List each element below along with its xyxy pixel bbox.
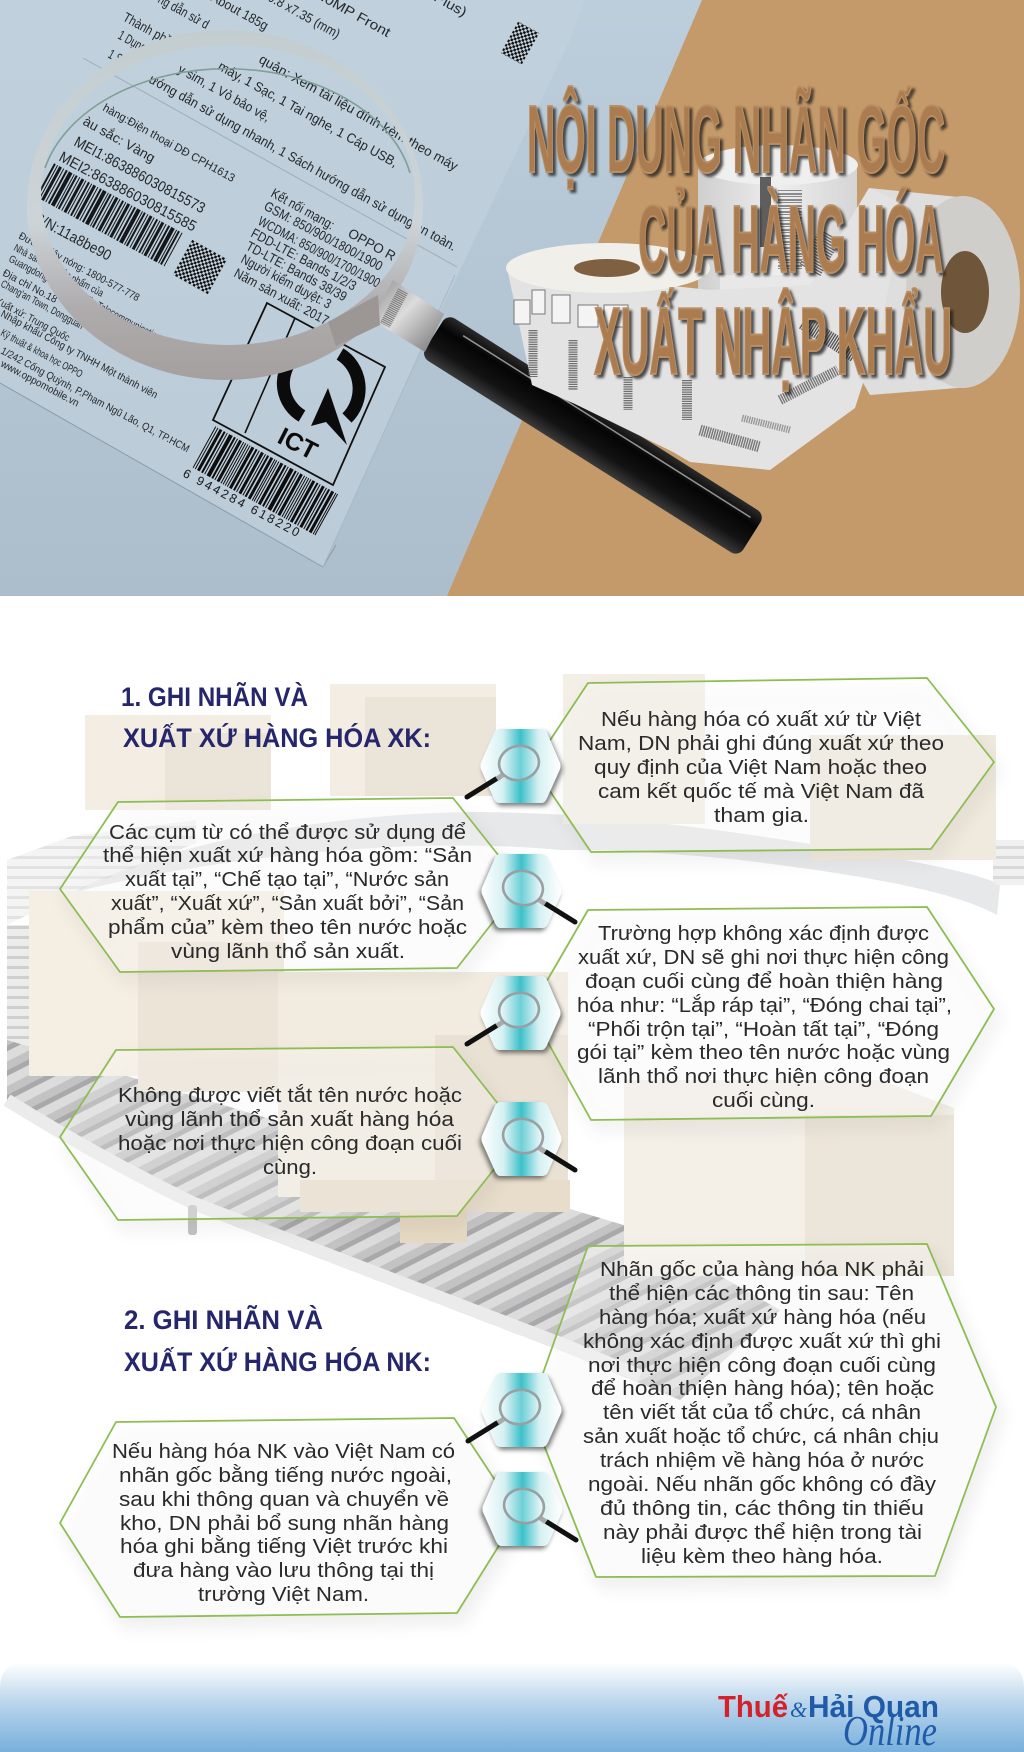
sheet printed text: Guangdong OPPO Mobile Telecommunications: [7, 253, 167, 346]
title: [527, 85, 952, 395]
sheet printed text: àu sắc: Vàng: [81, 114, 158, 165]
panel text: xuất”, “Xuất xứ”, “Sản xuất bởi”, “Sản: [111, 893, 464, 915]
lens ring: [27, 30, 423, 380]
sheet printed text: Chang'an Town, Dongguan: [0, 278, 86, 332]
sheet printed text: ướng dẫn sử dụng nhanh, 1 Sách hướng dẫn sử dụng an toàn.: [147, 72, 459, 254]
panel text: để hoàn thiện hàng hóa); tên hoặc: [591, 1378, 934, 1400]
sheet printed text: 1/242 Cống Quỳnh, P.Phạm Ngũ Lão, Q1, TP.HCM: [0, 345, 191, 455]
sheet printed text: 1 Sim: [106, 47, 134, 71]
sheet printed text: Thành phần: [121, 10, 180, 52]
panel text: Nếu hàng hóa có xuất xứ từ Việt: [601, 709, 921, 731]
panel text: Không được viết tắt tên nước hoặc: [118, 1084, 462, 1107]
panel: export left 1: [60, 798, 522, 972]
curling label strip: [507, 188, 905, 470]
panel text: [118, 1084, 462, 1179]
panel text: hóa như: “Lắp ráp tại”, “Đóng chai tại”,: [577, 994, 952, 1017]
panel text: cam kết quốc tế mà Việt Nam đã: [598, 781, 925, 803]
panel text: Các cụm từ có thể được sử dụng để: [109, 822, 466, 844]
panel: import left: [60, 1418, 518, 1617]
sheet printed text: 1 Dụng: [116, 28, 149, 55]
panel text: Trường hợp không xác định được: [598, 923, 929, 945]
sheet printed text: FDD-LTE: Bands 1/2/3: [249, 225, 359, 294]
panel: export left 2: [60, 1047, 522, 1220]
panel text: ngoài. Nếu nhãn gốc không có đầy: [588, 1474, 936, 1496]
panel text: trách nhiệm về hàng hóa ở nước: [600, 1450, 924, 1472]
panel text: phẩm của” kèm theo tên nước hoặc: [108, 917, 467, 939]
panel text: gói tại” kèm theo tên nước hoặc vùng: [577, 1042, 950, 1064]
panel text: nơi thực hiện công đoạn cuối cùng: [588, 1355, 936, 1377]
right roll: [810, 188, 1020, 395]
sheet printed text: OPPO R: [346, 226, 399, 264]
panel text: trường Việt Nam.: [198, 1584, 369, 1606]
hero banner: [0, 0, 1024, 596]
conveyor belts: [7, 812, 1024, 1400]
data matrix codes: [173, 240, 227, 294]
handle: [421, 314, 765, 557]
faded warehouse background: [7, 674, 1024, 1400]
icon: magnifier 1: [467, 729, 560, 803]
sheet printed text: MEI2:863886030815585: [56, 149, 199, 235]
panel text: [112, 1441, 455, 1606]
panel text: vùng lãnh thổ sản xuất hàng hóa: [125, 1109, 455, 1131]
panel text: liệu kèm theo hàng hóa.: [641, 1546, 883, 1568]
sheet printed text: Kỹ thuật & khoa học OPPO: [0, 327, 85, 380]
sheet printed text: hàng:Điện thoại DĐ CPH1613: [101, 102, 237, 185]
sheet printed text: y sim, 1 Vỏ bảo vệ,: [176, 62, 273, 125]
icon: magnifier 5: [468, 1373, 562, 1447]
sheet printed text: www.oppomobile.vn: [0, 358, 81, 410]
panel text: Nhãn gốc của hàng hóa NK phải: [600, 1259, 924, 1281]
heading: section 1: [121, 681, 431, 753]
panel text: tên viết tắt của tổ chức, cá nhân: [603, 1401, 921, 1424]
panel text: thể hiện các thông tin sau: Tên: [609, 1283, 914, 1305]
heading: section 2: XUẤT XỨ HÀNG HÓA NK:: [124, 1346, 431, 1377]
panel text: đoạn cuối cùng để hoàn thiện hàng: [585, 971, 943, 993]
sheet printed text: MEI1:863886030815573: [71, 134, 208, 217]
heading: section 2: [124, 1304, 431, 1377]
sheet printed text: WCDMA: 850/900/1700/1900: [256, 213, 383, 290]
logo: &: [790, 1697, 808, 1722]
heading: section 1: XUẤT XỨ HÀNG HÓA XK:: [123, 722, 431, 753]
label rolls: [506, 145, 1020, 470]
panel text: [103, 822, 472, 963]
heading: section 1: 1. GHI NHÃN VÀ: [121, 681, 308, 712]
panel text: “Phối trộn tại”, “Hoàn tất tại”, “Đóng: [588, 1019, 939, 1041]
icon: magnifier 4: [482, 1102, 575, 1176]
footer band: [0, 1663, 1024, 1752]
sheet printed text: máy, 1 Sạc, 1 Tai nghe, 1 Cáp USB,: [216, 59, 400, 170]
logo: Thuế: [718, 1689, 789, 1724]
panel text: cuối cùng.: [712, 1090, 815, 1112]
sheet printed text: [0, 0, 469, 455]
panel text: thể hiện xuất xứ hàng hóa gồm: “Sản: [103, 845, 472, 867]
panel: export right 1: [533, 678, 994, 852]
panel text: [583, 1259, 941, 1568]
icon: magnifier 2: [482, 854, 575, 928]
sheet printed text: Nhà sản xuất Sản phẩm của: [12, 242, 106, 300]
heading: section 2: 2. GHI NHÃN VÀ: [124, 1304, 323, 1335]
panel text: hoặc nơi thực hiện công đoạn cuối: [118, 1133, 462, 1155]
panel text: nhãn gốc bằng tiếng nước ngoài,: [119, 1464, 452, 1487]
panel text: này phải được thể hiện trong tài: [603, 1522, 922, 1544]
panel: import right: [530, 1244, 996, 1577]
sheet printed text: S/N:11a8be90: [31, 210, 114, 264]
collar: [372, 280, 444, 352]
logo: [718, 1689, 939, 1752]
icon: magnifier 6: [482, 1472, 576, 1546]
sheet printed text: quản: Xem tài liệu đính kèm theo máy: [257, 52, 461, 174]
panel text: sản xuất hoặc tổ chức, cá nhân chịu: [583, 1426, 939, 1448]
panel text: cùng.: [263, 1157, 317, 1179]
panel text: lãnh thổ nơi thực hiện công đoạn: [598, 1066, 929, 1088]
sheet printed text: Nhập khẩu Công ty TNHH Một thành viên: [0, 308, 160, 401]
panel text: không xác định được xuất xứ thì ghi: [583, 1331, 941, 1353]
panel: export right 2: [530, 907, 994, 1120]
panel text: đủ thông tin, các thông tin thiếu: [600, 1498, 924, 1520]
panel text: xuất xứ, DN sẽ ghi nơi thực hiện công: [578, 947, 949, 969]
panel text: hóa ghi bằng tiếng Việt trước khi: [120, 1535, 448, 1558]
panel text: sau khi thông quan và chuyển về: [119, 1489, 449, 1511]
panel text: tham gia.: [714, 805, 809, 827]
sheet printed text: Người kiểm duyệt: 3: [239, 251, 334, 312]
back roll: [698, 145, 858, 350]
barcode digits: 6 944284 618220: [181, 466, 302, 540]
sheet printed text: GSM: 850/900/1800/1900: [262, 198, 385, 274]
panel text: kho, DN phải bổ sung nhãn hàng: [120, 1513, 449, 1535]
sheet printed text: Năm sản xuất: 2017: [232, 265, 331, 328]
tan background: [447, 0, 1024, 596]
cardboard boxes: [29, 674, 996, 1276]
panel text: đưa hàng vào lưu thông tại thị: [133, 1560, 434, 1582]
panel text: [577, 923, 952, 1112]
sheet printed text: Đường dây nóng: 1800-577-778: [17, 230, 142, 304]
certification box with ICT logo: ICT: [273, 422, 322, 466]
panel text: Nam, DN phải ghi đúng xuất xứ theo: [578, 733, 944, 755]
panel text: vùng lãnh thổ sản xuất.: [171, 941, 405, 963]
panel text: hàng hóa; xuất xứ hàng hóa (nếu: [599, 1307, 926, 1329]
panel text: quy định của Việt Nam hoặc theo: [594, 757, 927, 779]
icon: magnifier 3: [467, 976, 560, 1050]
sheet printed text: Kết nối mạng:: [269, 186, 337, 233]
logo: Hải Quan: [808, 1689, 939, 1724]
front left roll: [506, 243, 710, 420]
barcode: EAN: [204, 447, 327, 515]
sheet printed text: Địa chỉ No.18: [1, 267, 59, 306]
panel text: xuất tại”, “Chế tạo tại”, “Nước sản: [125, 869, 449, 891]
magnifying glass: [27, 30, 765, 557]
certification box with ICT logo: [213, 303, 385, 485]
panel text: [578, 709, 944, 827]
label sheet: [0, 0, 585, 567]
barcode: IMEI: [45, 180, 174, 250]
sheet printed text: TD-LTE: Bands 38/39: [244, 238, 350, 304]
panel text: Nếu hàng hóa NK vào Việt Nam có: [112, 1441, 455, 1463]
